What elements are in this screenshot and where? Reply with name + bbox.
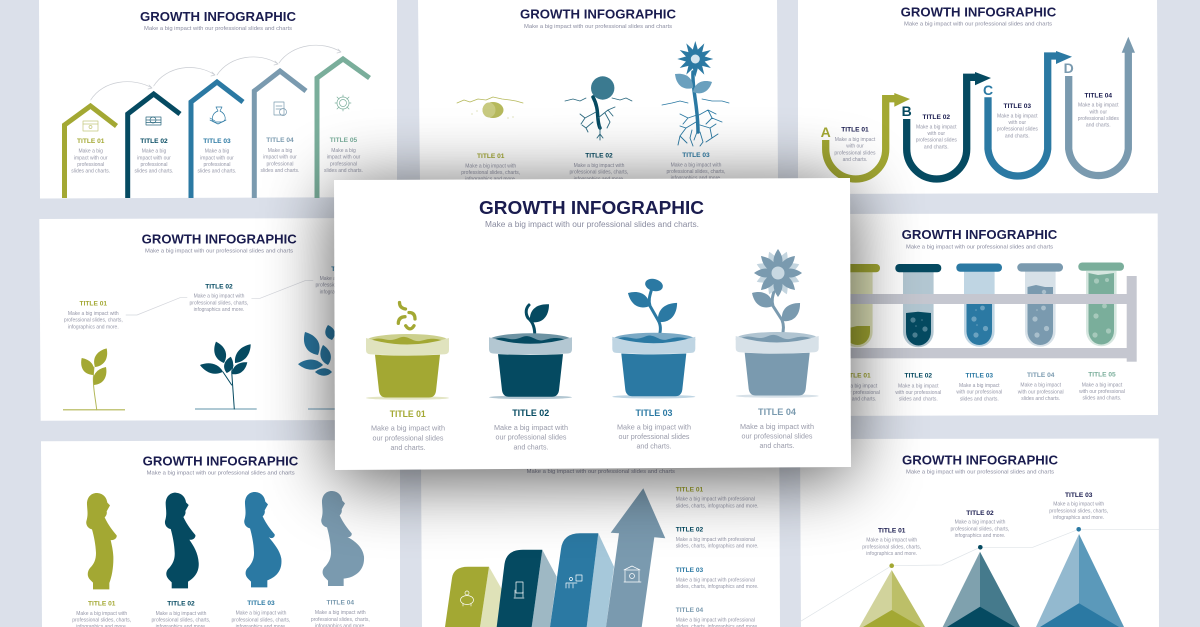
step labels: infographics and more. [955, 533, 1005, 539]
step labels: Make a big impact with [574, 163, 625, 169]
step labels: TITLE 01 [878, 528, 906, 535]
pot body [745, 353, 810, 396]
description 2 [494, 423, 568, 451]
step labels: impact with our [200, 155, 234, 161]
step labels: TITLE 02 [140, 138, 168, 145]
step labels: Make a big impact with [68, 311, 119, 317]
description 1: Make a big impact with [371, 424, 445, 433]
description 3: and charts. [636, 442, 672, 451]
pot shadow [736, 394, 819, 398]
step labels: TITLE 02 [167, 601, 195, 608]
description 2: Make a big impact with [494, 423, 568, 432]
step labels [71, 137, 363, 175]
slide background [41, 440, 400, 627]
step labels: professional slides, charts, [862, 544, 921, 550]
pyramid 2 [943, 545, 1020, 627]
side text list: Make a big impact with professional [676, 577, 755, 583]
step labels: professional [141, 162, 167, 168]
step labels: professional slides, charts, [316, 283, 374, 289]
icon: person at board [566, 575, 582, 588]
step labels: professional slides [916, 138, 957, 144]
step labels: slides and charts. [838, 397, 876, 403]
side text list: slides, charts, infographics and more. [676, 584, 759, 590]
step labels: Make a big impact [835, 137, 876, 143]
connector line [800, 529, 1159, 622]
slide subtitle: Make a big impact with our professional slides and charts [145, 248, 293, 254]
step labels: Make a big [78, 149, 103, 155]
panel: house arrows slide [39, 0, 397, 198]
step labels: professional slides, charts, [72, 618, 131, 624]
step labels: infographics and more. [574, 176, 624, 182]
slide title: GROWTH INFOGRAPHIC [520, 6, 677, 22]
panel: U-turn arrows slide [798, 0, 1158, 194]
step labels: TITLE 04 [1027, 372, 1055, 379]
step labels: TITLE 03 [1065, 492, 1093, 499]
icon: gear [335, 95, 351, 111]
slide subtitle: Make a big impact with our professional slides and charts [527, 469, 675, 475]
panel: pregnancy silhouettes slide [41, 440, 400, 627]
pyramid 1 [859, 563, 925, 627]
test tube 5 [1078, 262, 1124, 346]
pot 1 [366, 302, 449, 400]
step labels: and charts. [924, 144, 949, 150]
description 2: our professional slides [496, 433, 567, 442]
label: title 02: TITLE 02 [512, 408, 549, 419]
step labels: slides and charts. [135, 169, 173, 175]
step labels: professional slides, charts, [311, 617, 370, 623]
step labels: slides and charts. [71, 169, 110, 175]
step labels: TITLE 02 [205, 283, 233, 290]
seed illustration [457, 97, 523, 118]
description 1: our professional slides [372, 433, 444, 442]
ribbon fold: green [480, 567, 502, 627]
step labels: impact with our [327, 155, 361, 161]
step labels: professional slides, charts, [190, 300, 248, 306]
step labels: slides and charts. [899, 397, 938, 403]
step labels: TITLE 04 [327, 600, 354, 607]
step labels: infographics and more. [465, 176, 516, 182]
panel: seed to flower slide [418, 0, 778, 182]
step labels: and charts. [1086, 123, 1111, 129]
description 3: our professional slides [618, 432, 690, 441]
step labels: TITLE 01 [88, 601, 116, 608]
U arrow D: D [1064, 60, 1074, 76]
icon: money bag [210, 107, 226, 124]
test tube rack [800, 276, 1137, 362]
U arrow D [1064, 37, 1135, 176]
soil [612, 333, 695, 347]
step labels [834, 372, 1125, 403]
step labels: TITLE 01 [80, 301, 107, 308]
step labels: with our [1090, 109, 1107, 115]
sprout [525, 299, 554, 338]
description 4: and charts. [760, 441, 794, 450]
step labels: and charts. [1005, 133, 1030, 139]
pot shadow [366, 396, 449, 400]
step labels: infographics and more. [866, 551, 917, 557]
side text list: slides, charts, infographics and more. [676, 503, 759, 509]
step labels: professional [330, 161, 357, 167]
slide background [39, 0, 397, 198]
soil [366, 334, 449, 348]
step labels [72, 600, 370, 627]
step labels: TITLE 02 [966, 510, 994, 517]
U arrow A [821, 93, 910, 179]
step labels: TITLE 01 [843, 373, 871, 380]
flower with roots illustration [662, 41, 729, 146]
step labels: Make a big impact with [866, 538, 917, 544]
test tube 2 [895, 264, 941, 347]
step labels: professional slides, charts, [951, 526, 1009, 532]
U arrow C: C [983, 82, 993, 98]
panel: central plant pots slide [334, 178, 851, 470]
soil [489, 333, 572, 347]
test tube 3 [956, 264, 1002, 347]
step labels: Make a big impact with [671, 162, 722, 168]
step labels: Make a big impact [1082, 382, 1123, 388]
description 2: and charts. [514, 442, 548, 451]
slide background [421, 460, 780, 627]
ribbon step: green [445, 567, 489, 627]
step labels: TITLE 01 [841, 127, 869, 134]
U arrow B [902, 72, 991, 179]
seedling 1 [63, 345, 125, 410]
step labels: Make a big [205, 149, 229, 155]
pot 2 [489, 299, 572, 399]
icon: piggy bank [460, 591, 474, 606]
step labels: Make a big impact [997, 113, 1038, 119]
side text list: Make a big impact with professional [676, 618, 755, 624]
description 1: and charts. [390, 443, 426, 452]
silhouette 4 [321, 491, 364, 586]
step labels: TITLE 05 [330, 137, 358, 144]
rim [736, 336, 819, 353]
step labels: with our [846, 144, 864, 150]
side text list [676, 486, 759, 627]
seedling 3 [298, 324, 340, 409]
step labels: Make a big impact with [320, 276, 371, 282]
silhouette 3 [244, 492, 281, 587]
step labels: Make a big impact [1020, 383, 1062, 389]
step labels: TITLE 03 [203, 138, 231, 145]
slide title: GROWTH INFOGRAPHIC [143, 454, 299, 469]
step labels: Make a big [331, 148, 356, 154]
card background [334, 178, 851, 470]
step labels [64, 266, 374, 330]
slide background [418, 0, 778, 182]
step labels: professional slides, charts, [461, 170, 520, 176]
ribbon step: dark [497, 550, 542, 627]
step labels: with our professional [1079, 389, 1125, 395]
test tube 1 [834, 264, 880, 347]
step labels: TITLE 02 [923, 114, 950, 121]
step labels: Make a big [142, 149, 166, 155]
icon: banknote [83, 121, 98, 131]
step labels: Make a big impact with [156, 611, 207, 617]
step labels: TITLE 02 [905, 373, 932, 380]
ribbon fold: dark [532, 550, 557, 627]
step labels: professional slides, charts, [667, 169, 725, 175]
pot body [621, 354, 686, 396]
main title: GROWTH INFOGRAPHIC [479, 197, 704, 218]
connector lines [126, 281, 313, 315]
slide title: GROWTH INFOGRAPHIC [902, 227, 1058, 242]
step labels: Make a big impact with [315, 610, 366, 616]
panel: test tubes slide [800, 214, 1158, 416]
step labels: Make a big impact with [955, 520, 1006, 526]
curved connector arrows [91, 45, 341, 100]
step labels: slides and charts. [324, 168, 363, 174]
description 4: our professional slides [742, 432, 813, 440]
step labels: TITLE 01 [77, 138, 105, 145]
slide title: GROWTH INFOGRAPHIC [902, 452, 1059, 467]
slide subtitle: Make a big impact with our professional slides and charts [144, 26, 292, 32]
step labels: impact with our [263, 155, 297, 161]
rim [612, 337, 695, 354]
step labels: professional slides, charts, [1049, 508, 1108, 514]
step labels: TITLE 04 [266, 137, 294, 144]
step labels: professional [267, 161, 293, 167]
pot body [375, 355, 440, 398]
step labels: Make a big impact [837, 383, 878, 389]
seed sprouts [398, 302, 415, 329]
step labels: professional [77, 162, 104, 168]
step labels [862, 492, 1108, 557]
step labels [461, 152, 725, 182]
flowering plant [748, 249, 805, 336]
ribbon fold: blue [587, 533, 614, 627]
step labels: professional slides, charts, [570, 170, 628, 176]
step labels: infographics and more. [320, 289, 370, 295]
main card drop shadow [334, 186, 851, 480]
silhouette 1 [86, 493, 117, 589]
house arrow outlines [64, 59, 370, 198]
step labels: TITLE 03 [1004, 103, 1031, 110]
slide title: GROWTH INFOGRAPHIC [142, 231, 297, 246]
step labels: professional slides [997, 127, 1038, 133]
description 4: Make a big impact with [740, 422, 814, 431]
label: title 01: TITLE 01 [390, 409, 426, 420]
step labels: with our [1009, 120, 1026, 126]
step labels: professional [204, 162, 230, 168]
slide title: GROWTH INFOGRAPHIC [140, 9, 297, 24]
side text list: slides, charts, infographics and more. [676, 544, 759, 550]
description 3 [617, 422, 691, 451]
icon: calculator and coin [274, 102, 286, 116]
step labels: slides and charts. [1021, 396, 1060, 402]
ribbon arrow chart [445, 488, 665, 627]
step labels: TITLE 03 [331, 266, 359, 273]
ribbon arrow head [606, 488, 665, 627]
step labels: infographics and more. [194, 307, 244, 313]
U arrow C [983, 51, 1072, 176]
slide background [800, 214, 1158, 416]
test tube 4 [1017, 263, 1063, 347]
icon: bank [624, 566, 641, 582]
side text list: TITLE 04 [676, 607, 704, 614]
step labels: Make a big impact [898, 383, 939, 389]
step labels: TITLE 03 [966, 372, 993, 379]
slide background [798, 0, 1158, 194]
soil [736, 332, 819, 346]
step labels: Make a big impact [916, 124, 957, 130]
U arrow A: A [821, 124, 831, 140]
step labels: Make a big impact with [465, 164, 516, 170]
slide subtitle: Make a big impact with our professional slides and charts [906, 469, 1054, 475]
sprouting seed illustration [565, 76, 632, 140]
step labels: TITLE 02 [585, 153, 613, 160]
step labels: professional slides, charts, [64, 318, 123, 324]
step labels: Make a big impact [1078, 103, 1119, 109]
icon: hand and card [514, 582, 524, 598]
step labels: impact with our [137, 155, 171, 161]
label: title 03: TITLE 03 [636, 408, 672, 419]
step labels: slides and charts. [960, 396, 999, 402]
slide subtitle: Make a big impact with our professional slides and charts [147, 471, 295, 477]
step labels [834, 92, 1119, 163]
slide background [39, 218, 400, 421]
pot shadow [612, 395, 695, 399]
step labels: infographics and more. [68, 324, 119, 330]
description 4 [740, 422, 814, 450]
step labels: impact with our [74, 155, 108, 161]
ribbon step: blue [550, 533, 598, 627]
step labels: infographics and more. [671, 176, 721, 182]
step labels: with our professional [956, 390, 1002, 396]
step labels: with our professional [834, 390, 880, 396]
seedling 2 [195, 340, 257, 409]
step labels: TITLE 03 [682, 152, 710, 159]
step labels: Make a big impact with [236, 611, 287, 617]
main subtitle: Make a big impact with our professional slides and charts. [485, 220, 699, 229]
step labels: with our [928, 131, 945, 137]
step labels: infographics and more. [1053, 515, 1104, 521]
step labels: Make a big impact [959, 383, 1000, 389]
side text list: TITLE 03 [676, 567, 704, 574]
slide subtitle: Make a big impact with our professional slides and charts [906, 244, 1053, 250]
slide subtitle: Make a big impact with our professional slides and charts [904, 22, 1052, 28]
step labels: slides and charts. [1083, 396, 1121, 402]
step labels: professional slides [834, 150, 876, 156]
panel: pyramids slide [800, 438, 1159, 627]
pot 3 [612, 277, 695, 399]
icon: coins [146, 117, 161, 125]
step labels: Make a big impact with [76, 611, 127, 617]
panel: ribbon arrow slide [421, 460, 780, 627]
side text list: Make a big impact with professional [676, 537, 755, 543]
description 1 [371, 424, 445, 452]
slide title: GROWTH INFOGRAPHIC [901, 5, 1057, 20]
side text list: TITLE 01 [676, 486, 704, 493]
step labels: Make a big impact with [194, 294, 245, 300]
pot shadow [489, 396, 572, 399]
step labels: with our professional [1018, 389, 1064, 395]
step labels: professional slides [1078, 116, 1119, 122]
panel: seedlings slide [39, 218, 400, 421]
step labels: TITLE 03 [247, 600, 275, 607]
slide background [800, 438, 1159, 627]
slide subtitle: Make a big impact with our professional slides and charts [524, 24, 672, 30]
pyramid 3 [1036, 527, 1124, 627]
step labels: TITLE 04 [1085, 92, 1112, 99]
rim [366, 338, 449, 355]
side text list: Make a big impact with professional [676, 497, 755, 503]
description 3: Make a big impact with [617, 422, 691, 432]
step labels: with our professional [895, 390, 941, 396]
pot body [498, 354, 563, 397]
U arrow B: B [902, 103, 912, 119]
side text list: TITLE 02 [676, 527, 704, 534]
silhouette 2 [165, 493, 199, 588]
pot 4 [736, 249, 819, 398]
step labels: TITLE 05 [1088, 372, 1116, 379]
step labels: professional slides, charts, [152, 618, 210, 624]
plant with bud [625, 277, 682, 337]
step labels: Make a big [268, 148, 292, 154]
step labels: TITLE 01 [477, 153, 505, 160]
step labels: Make a big impact with [1053, 502, 1104, 508]
rim [489, 337, 572, 355]
step labels: slides and charts. [198, 169, 236, 175]
step labels: slides and charts. [261, 168, 299, 174]
step labels: professional slides, charts, [232, 617, 290, 623]
step labels: and charts. [843, 157, 867, 163]
label: title 04: TITLE 04 [758, 407, 797, 418]
